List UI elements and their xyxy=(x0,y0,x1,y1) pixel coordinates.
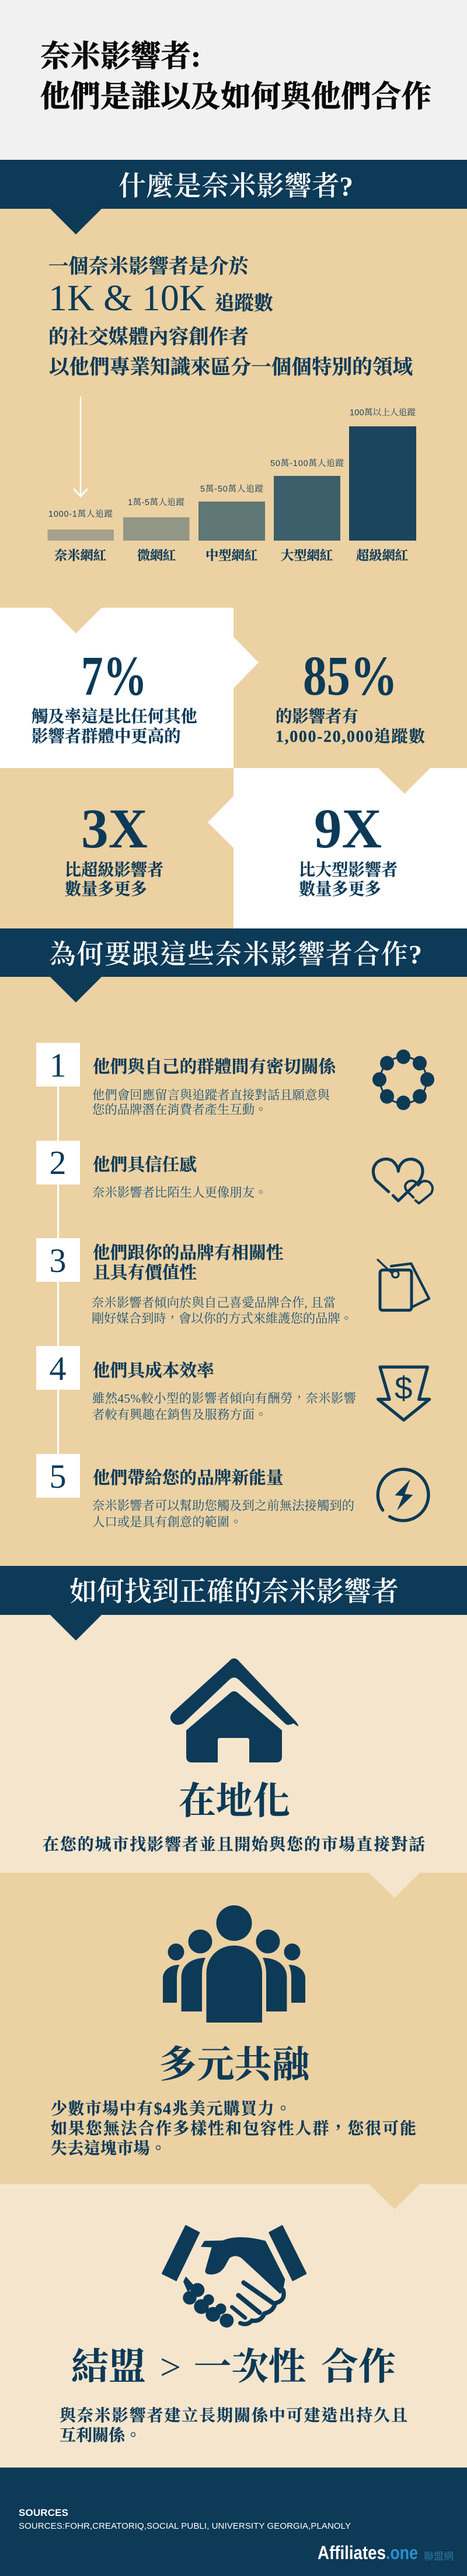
body text: alliances: 互利關係。 xyxy=(60,2426,141,2445)
body text: diversity: 如果您無法合作多樣性和包容性人群，您很可能 xyxy=(51,2119,416,2138)
stat: 85%: 85% xyxy=(303,644,398,707)
reason text: 他們具成本效率 xyxy=(93,1361,214,1380)
subheading: alliances: 一次性 xyxy=(194,2346,306,2388)
icon: dollar down arrow xyxy=(378,1367,430,1420)
logo: Affiliates.one: Affiliates xyxy=(318,2542,386,2563)
number badge xyxy=(36,1043,80,1087)
section banner: 如何找到正確的奈米影響者 xyxy=(69,1577,399,1607)
panel: footer xyxy=(0,2468,467,2576)
stat: 9X: 比大型影響者 xyxy=(299,861,398,879)
panel: alliances over one-off deals xyxy=(0,2184,467,2468)
body text: localization: 在您的城市找影響者並且開始與您的市場直接對話 xyxy=(43,1835,425,1854)
stat: 9X: 數量多更多 xyxy=(299,880,381,899)
stat: 85% xyxy=(234,608,467,768)
title: 他們是誰以及如何與他們合作 xyxy=(40,80,431,114)
body text: diversity: 失去這塊市場。 xyxy=(51,2139,166,2158)
icon: two hearts xyxy=(373,1159,433,1203)
reason 5 xyxy=(36,1454,428,1529)
sources xyxy=(19,2507,351,2531)
section banner: 為何要跟這些奈米影響者合作? xyxy=(49,940,422,969)
logo: Affiliates.one xyxy=(318,2542,454,2563)
bar: mega xyxy=(349,407,416,563)
reason 3 xyxy=(36,1238,429,1326)
definition text block: 一個奈米影響者是介於 xyxy=(48,255,249,278)
reason text: 奈米影響者可以幫助您觸及到之前無法接觸到的 xyxy=(92,1499,354,1513)
reason text: 他們具信任感 xyxy=(93,1155,197,1175)
section banner xyxy=(0,1566,467,1641)
reason text: 他們跟你的品牌有相關性 xyxy=(93,1243,284,1263)
body text: diversity: 少數市場中有$4兆美元購買力。 xyxy=(51,2100,291,2118)
subheading: alliances xyxy=(71,2346,396,2388)
number badge xyxy=(36,1238,80,1282)
reason text xyxy=(92,1155,267,1200)
subheading: alliances: 結盟 xyxy=(71,2346,146,2388)
panel: how to find the right nano influencer xyxy=(0,1566,467,2468)
number badge xyxy=(36,1454,80,1498)
definition text block: 的社交媒體內容創作者 xyxy=(48,326,249,348)
number badge: 1 xyxy=(49,1046,67,1084)
panel: statistics grid xyxy=(0,608,467,928)
definition text block: 追蹤數 xyxy=(215,293,273,314)
subheading: localization: 在地化 xyxy=(179,1781,290,1822)
definition text block: 以他們專業知識來區分一個個特別的領域 xyxy=(49,356,413,378)
reason text: 奈米影響者傾向於與自己喜愛品牌合作, 且當 xyxy=(92,1296,336,1310)
logo: Affiliates.one: 聯盟網 xyxy=(424,2551,454,2562)
stat: 9X xyxy=(208,768,467,928)
reason text: 者較有興趣在銷售及服務方面。 xyxy=(92,1408,267,1422)
panel: diversity and inclusion xyxy=(0,1873,467,2184)
subheading: alliances: 合作 xyxy=(321,2346,396,2388)
reason text xyxy=(92,1243,353,1326)
bar: mid xyxy=(198,483,265,563)
number badge: 5 xyxy=(49,1457,67,1495)
section banner xyxy=(0,928,467,1003)
stat: 3X: 比超級影響者 xyxy=(65,861,163,879)
number badge xyxy=(36,1346,80,1390)
panel: why work with nano influencers xyxy=(0,928,467,1566)
stat: 3X: 數量多更多 xyxy=(65,880,147,899)
reason text xyxy=(92,1361,356,1422)
icon: handshake xyxy=(162,2226,306,2328)
reason text: 他們帶給您的品牌新能量 xyxy=(93,1469,284,1488)
reason text xyxy=(92,1057,337,1117)
reason text: 且具有價值性 xyxy=(93,1263,197,1282)
bar: nano: 1000-1萬人追蹤 xyxy=(48,509,113,519)
icon: house xyxy=(170,1659,298,1762)
stat: 3X: 3X xyxy=(81,797,148,860)
stat: 85%: 1,000-20,000追蹤數 xyxy=(276,727,425,746)
bar: micro: 微網紅 xyxy=(137,548,176,563)
definition text block xyxy=(48,255,413,378)
number badge: 2 xyxy=(49,1144,67,1182)
bar: mega: 超級網紅 xyxy=(356,548,408,563)
reason text: 您的品牌潛在消費者產生互動。 xyxy=(92,1103,267,1117)
reason 4 xyxy=(36,1346,430,1422)
icon: connected circle of dots xyxy=(372,1050,434,1110)
body text: diversity xyxy=(51,2100,416,2158)
sources: SOURCES xyxy=(19,2507,68,2518)
section banner: 什麼是奈米影響者? xyxy=(119,171,353,202)
bar: macro: 50萬-100萬人追蹤 xyxy=(270,458,344,468)
subheading: alliances: > xyxy=(160,2346,181,2388)
definition text block: 1K & 10K xyxy=(48,277,206,318)
logo: Affiliates.one: .one xyxy=(386,2542,418,2563)
bar: macro: 大型網紅 xyxy=(281,548,333,563)
bar: micro xyxy=(123,497,189,563)
stat: 7%: 7% xyxy=(81,644,147,707)
reason 1 xyxy=(36,1043,434,1117)
bar chart: influencer tiers xyxy=(48,407,416,563)
stat: 85%: 的影響者有 xyxy=(276,707,358,726)
number badge: 4 xyxy=(49,1350,67,1387)
bar: nano: 奈米網紅 xyxy=(54,548,106,563)
title xyxy=(40,40,431,114)
reason text: 奈米影響者比陌生人更像朋友。 xyxy=(92,1186,267,1200)
stat: 7%: 影響者群體中更高的 xyxy=(32,727,181,746)
reason text xyxy=(92,1469,354,1529)
reason 2 xyxy=(36,1141,433,1203)
number badge xyxy=(36,1141,80,1184)
body text: alliances: 與奈米影響者建立長期關係中可建造出持久且 xyxy=(60,2406,407,2425)
number badge: 3 xyxy=(49,1242,67,1280)
panel: what is a nano influencer xyxy=(0,160,467,608)
body text: alliances xyxy=(60,2406,407,2445)
icon: group of people xyxy=(163,1905,305,2023)
bar: mega: 100萬以上人追蹤 xyxy=(350,407,416,418)
reason text: 人口或是具有創意的範圍。 xyxy=(92,1515,242,1529)
subheading: diversity: 多元共融 xyxy=(159,2044,312,2086)
stat: 3X xyxy=(0,768,234,928)
arrow: pointing to nano tier xyxy=(74,397,87,496)
section banner xyxy=(0,160,467,234)
bar: nano xyxy=(48,509,114,563)
stat: 7%: 觸及率這是比任何其他 xyxy=(32,707,197,726)
icon: energy bolt xyxy=(378,1469,428,1520)
panel: localization xyxy=(0,1566,467,1873)
bar: mid: 5萬-50萬人追蹤 xyxy=(200,483,264,494)
bar: micro: 1萬-5萬人追蹤 xyxy=(128,497,184,507)
reason text: 剛好媒合到時，會以你的方式來維護您的品牌。 xyxy=(92,1312,353,1326)
title: 奈米影響者: xyxy=(40,40,201,73)
bar: mid: 中型網紅 xyxy=(205,548,257,563)
icon: dollar down arrow: $ xyxy=(395,1370,413,1406)
panel: title header xyxy=(0,0,467,160)
stat: 9X: 9X xyxy=(314,797,382,860)
reason text: 他們會回應留言與追蹤者直接對話且願意與 xyxy=(92,1088,331,1102)
icon: price tags xyxy=(378,1260,429,1310)
bar: macro xyxy=(270,458,344,563)
reason text: 他們與自己的群體間有密切關係 xyxy=(93,1057,337,1077)
sources: SOURCES:FOHR,CREATORIQ,SOCIAL PUBLI, UNIVERSITY GEORGIA,PLANOLY xyxy=(19,2521,351,2531)
stat: 7% xyxy=(0,608,234,768)
reason text: 雖然45%較小型的影響者傾向有酬勞，奈米影響 xyxy=(92,1392,356,1406)
